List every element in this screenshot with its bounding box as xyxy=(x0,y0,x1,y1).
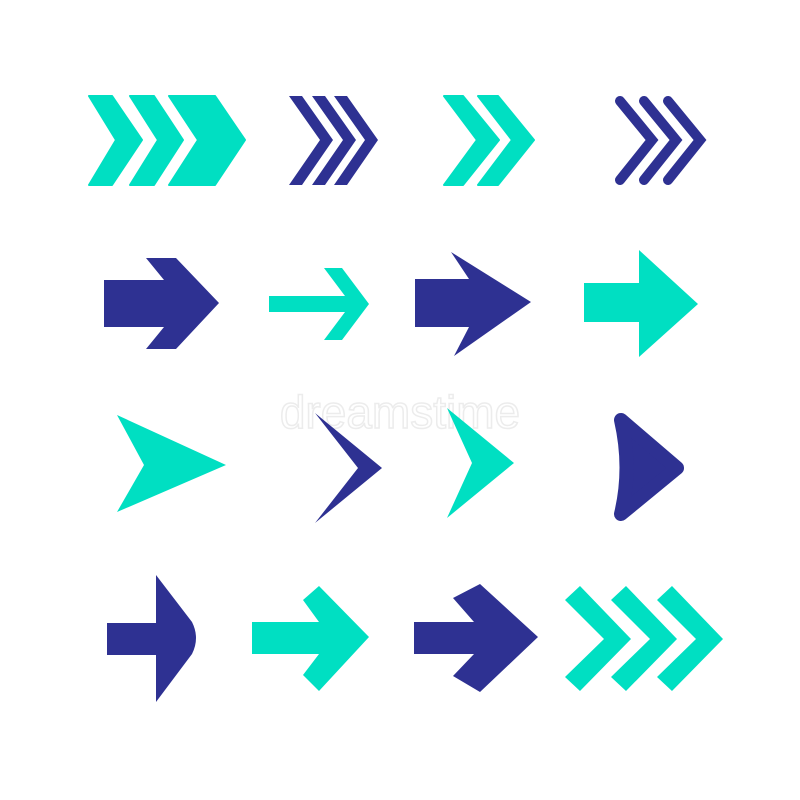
icon: navy thin triple chevron (row1) xyxy=(289,96,378,185)
watermark text: dreamstime xyxy=(280,386,520,438)
icon: navy block arrow (row2) xyxy=(104,258,219,349)
icon: navy chevron arrow (row4) xyxy=(414,584,538,692)
icon: teal triangle arrow (row2) xyxy=(584,250,698,357)
icon: teal arrowhead (row3) xyxy=(117,415,226,512)
icon: teal double chevron (row1) xyxy=(444,96,534,185)
icon: teal thin arrow (row2) xyxy=(269,268,369,340)
icon: navy thin arrowhead (row3) xyxy=(315,413,382,523)
icon: teal triple chevron (row4) xyxy=(565,586,723,691)
icon: teal chevron arrow (row4) xyxy=(252,586,369,691)
icon: navy rounded arrowhead (row3) xyxy=(621,420,677,514)
icon: navy rounded triple chevron (row1) xyxy=(620,101,700,180)
icon: navy sharp arrow (row2) xyxy=(415,252,531,356)
icon: navy rounded-head arrow (row4) xyxy=(107,575,196,702)
icon: teal triple chevron (row1) xyxy=(89,96,245,185)
icon: teal narrow arrowhead (row3) xyxy=(447,408,514,518)
